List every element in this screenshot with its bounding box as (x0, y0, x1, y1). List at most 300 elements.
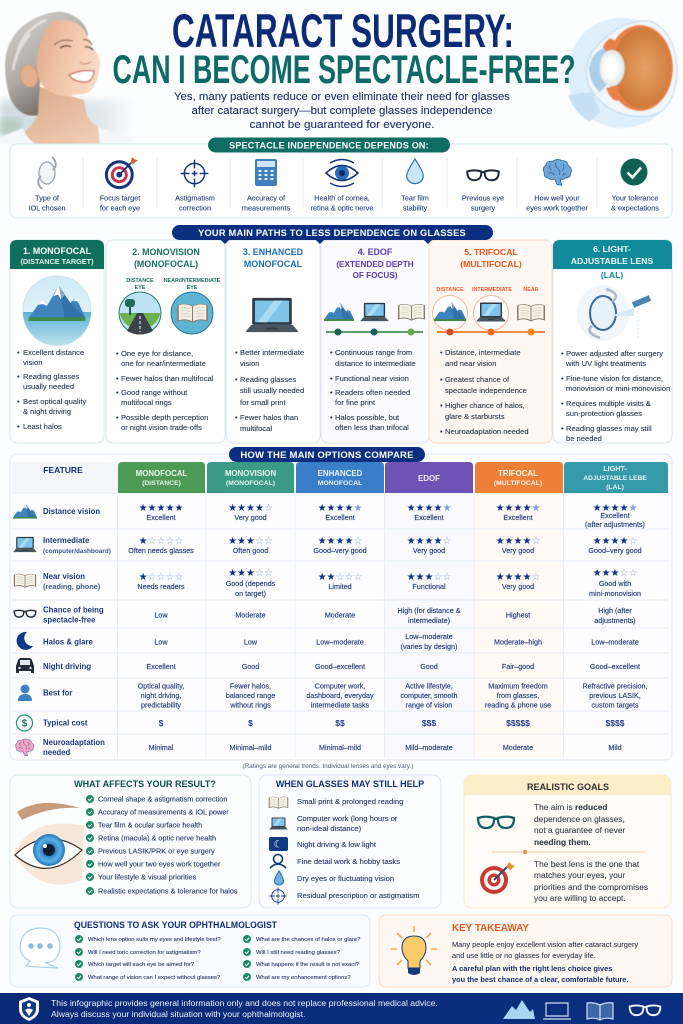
card 4: EDOF: distance to intermediate (335, 359, 416, 368)
card 2: monovision: (MONOFOCAL) (134, 259, 198, 269)
title: CATARACT SURGERY: (172, 4, 514, 57)
card 5: trifocal: (MULTIFOCAL) (460, 259, 522, 269)
row: neuroadaptation: Moderate (503, 743, 533, 752)
row: near vision: on target) (235, 589, 266, 598)
panel: questions to ask (10, 915, 370, 987)
card 5: trifocal: INTERMEDIATE (472, 287, 512, 293)
panel: what affects your result: Your lifestyle & visual priorities (98, 872, 197, 882)
row: best for: from glasses, (497, 691, 539, 700)
panel: when glasses may still help: WHEN GLASSES MAY STILL HELP (276, 779, 424, 789)
card 3: enhanced monofocal: multifocal (240, 424, 272, 433)
factor: IOL type: IOL chosen (28, 204, 66, 212)
card 5: trifocal: DISTANCE (436, 287, 464, 293)
card 2: monovision: • (116, 388, 119, 397)
row: distance vision (13, 503, 645, 529)
card 2: monovision: Possible depth perception (121, 413, 208, 422)
factor: tear film: Tear film (401, 194, 429, 202)
factor: focus target (100, 157, 140, 212)
card 1: monofocal: (DISTANCE TARGET) (20, 257, 94, 266)
row: neuroadaptation: Minimal (149, 743, 174, 752)
row: typical cost: $$$ (422, 718, 436, 728)
card 1: monofocal: • (17, 348, 20, 357)
row: near vision: ★★★★☆ (496, 572, 540, 583)
panel: when glasses may still help: non-ideal distance) (297, 824, 362, 833)
panel: questions to ask: Will I need toric correction for astigmatism? (88, 950, 201, 956)
card 6: light-adjustable lens: sun-protection glasses (566, 409, 642, 418)
card 4: EDOF: Readers often needed (335, 388, 410, 397)
row: typical cost (16, 715, 625, 731)
row: distance vision: (after adjustments) (585, 520, 645, 529)
card 5: trifocal: Distance, intermediate (445, 348, 521, 357)
card 3: enhanced monofocal: for small print (240, 398, 286, 407)
card 1: monofocal: Least halos (23, 422, 62, 431)
row: best for: intermediate tasks (311, 700, 370, 710)
card 5: trifocal: and near vision (445, 359, 497, 368)
row: near vision: Very good (502, 582, 534, 591)
card 4: EDOF: • (330, 413, 333, 422)
row: chance of being spectacle-free (14, 606, 636, 625)
panel: realistic goals: needing them. (534, 837, 591, 847)
factor: tear film (401, 159, 429, 212)
icon: eye illustration (13, 803, 84, 884)
card 6: light-adjustable lens: ADJUSTABLE LENS (571, 256, 653, 266)
panel: what affects your result: Previous LASIK/PRK or eye surgery (98, 846, 215, 856)
row: intermediate: Very good (502, 546, 534, 555)
panel: when glasses may still help: Dry eyes or fluctuating vision (297, 874, 394, 883)
row: typical cost: $$$$ (606, 718, 625, 728)
row: neuroadaptation: Minimal–mild (319, 743, 361, 752)
row: night driving: Excellent (146, 662, 176, 671)
card 3: enhanced monofocal: MONOFOCAL (244, 259, 303, 269)
row: halos and glare: (varies by design) (401, 642, 457, 651)
card 5: trifocal: Neuroadaptation needed (445, 427, 529, 436)
row: night driving: Good (242, 662, 259, 671)
row: intermediate: ★★★★☆ (407, 536, 451, 547)
row: distance vision: Distance vision (43, 507, 100, 516)
card 1: monofocal (10, 240, 104, 443)
row: best for: without rings (229, 700, 271, 710)
row: near vision: (reading, phone) (43, 582, 101, 591)
card 4: EDOF: Functional near vision (335, 374, 409, 383)
row: distance vision: ★★★★☆ (228, 503, 273, 514)
row: intermediate: ★☆☆☆☆ (139, 536, 183, 547)
icon: footer laptop (543, 1003, 571, 1019)
card 4: EDOF: Halos possible, but (335, 413, 400, 422)
card 6: light-adjustable lens: • (561, 399, 564, 408)
card 1: monofocal: • (17, 372, 20, 381)
factor: previous surgery: Previous eye (462, 194, 504, 202)
row: near vision: ★★★☆☆ (593, 568, 637, 579)
row: distance vision: ★★★★★ (407, 503, 451, 514)
card 3: enhanced monofocal: • (235, 413, 238, 422)
panel: when glasses may still help (259, 775, 441, 908)
factor: focus target: Focus target (100, 194, 140, 202)
row: night driving: Good (420, 662, 438, 671)
panel: what affects your result: Retina (macula) & optic nerve health (98, 834, 216, 842)
card 5: trifocal: • (440, 348, 443, 357)
card 6: light-adjustable lens: monovision or mini-monovision (566, 384, 670, 393)
row: best for: balanced range (226, 691, 275, 700)
photo: smiling older woman (0, 12, 135, 144)
footer bar: Always discuss your individual situation with your ophthalmologist. (51, 1009, 305, 1019)
factor: astigmatism: correction (179, 204, 211, 212)
row: chance of being spectacle-free: spectacle-free (43, 616, 96, 624)
factor: previous surgery (462, 170, 504, 212)
card 3: enhanced monofocal: Better intermediate (240, 348, 304, 357)
card 3: enhanced monofocal (226, 240, 320, 443)
card 5: trifocal: NEAR (523, 287, 539, 293)
panel: when glasses may still help: Residual prescription or astigmatism (297, 891, 419, 900)
card 6: light-adjustable lens: Requires multiple visits & (566, 399, 651, 408)
panel: when glasses may still help: ☾ (274, 840, 282, 850)
table header row: (MONOFOCAL) (226, 480, 275, 487)
panel: questions to ask: Which target will each eye be aimed for? (88, 962, 195, 968)
table header row: EDOF (418, 474, 440, 483)
panel: realistic goals: dependence on glasses, (534, 814, 625, 824)
footer bar (0, 993, 683, 1024)
row: near vision (14, 568, 641, 598)
row: typical cost: $$$$$ (506, 718, 530, 728)
row: best for (18, 682, 648, 710)
factor: binocular function: How well your (534, 194, 580, 202)
factor: measurements: Accuracy of (247, 194, 286, 202)
row: near vision: Near vision (43, 572, 85, 581)
icon: near eye book (171, 292, 213, 334)
row: distance vision: Excellent (600, 511, 630, 520)
icon: speech bubble (20, 928, 60, 968)
panel: spectacle independence factors (10, 138, 672, 218)
row: chance of being spectacle-free: High (for distance & (397, 606, 461, 615)
row: near vision: Functional (412, 582, 446, 591)
table header row: MONOVISION (225, 469, 276, 478)
row: night driving: Fair–good (502, 662, 534, 671)
row: best for: night driving, (141, 691, 181, 700)
row: chance of being spectacle-free: Highest (506, 610, 530, 620)
card 4: EDOF (321, 240, 429, 443)
card 3: enhanced monofocal: • (235, 348, 238, 357)
card 3: enhanced monofocal: Reading glasses (240, 375, 296, 384)
card 4: EDOF: often less than trifocal (335, 423, 409, 432)
comparison table (10, 447, 672, 760)
row: chance of being spectacle-free: Moderate (235, 610, 266, 620)
factor: measurements (242, 159, 290, 212)
row: typical cost: $ (248, 718, 253, 728)
card 6: light-adjustable lens: be needed (566, 434, 602, 443)
table header row (43, 462, 668, 493)
factor: expectations: & expectations (611, 204, 659, 212)
icon: light bulb (391, 926, 437, 975)
heading pill: main paths (172, 225, 493, 244)
row: best for: reading & phone use (485, 700, 551, 710)
card 1: monofocal: & night driving (23, 407, 71, 416)
row: best for: Computer work, (315, 682, 365, 690)
card 6: light-adjustable lens: Reading glasses may still (566, 424, 652, 433)
panel: key takeaway: and use little or no glasses for everyday life. (452, 951, 596, 960)
footer bar: This infographic provides general information only and does not replace professional medical advice. (51, 998, 438, 1008)
card 4: EDOF: • (330, 388, 333, 397)
factor: IOL type (28, 157, 66, 212)
row: halos and glare: Low–moderate (405, 632, 453, 641)
heading pill: SPECTACLE INDEPENDENCE DEPENDS ON: (229, 140, 429, 150)
panel: when glasses may still help: Night driving & low light (297, 840, 377, 849)
card 4: EDOF: OF FOCUS) (352, 271, 398, 280)
panel: questions to ask: What are the chances of halos or glare? (256, 937, 361, 943)
row: distance vision: ★★★★★ (139, 503, 183, 514)
panel: realistic goals: matches your eyes, your (534, 870, 625, 880)
row: best for: predictability (141, 700, 181, 710)
panel: questions to ask: QUESTIONS TO ASK YOUR OPHTHALMOLOGIST (74, 919, 277, 930)
card 2: monovision: multifocal rings (121, 398, 172, 407)
row: best for: Fewer halos, (230, 682, 271, 690)
panel: questions to ask: What happens if the result is not exact? (256, 962, 360, 968)
card 3: enhanced monofocal: 3. ENHANCED (243, 247, 304, 257)
panel: key takeaway: Many people enjoy excellent vision after cataract surgery (452, 940, 638, 949)
table header row: MONOFOCAL (318, 480, 362, 487)
card 2: monovision: Good range without (121, 388, 188, 397)
row: halos and glare: Low–moderate (591, 638, 639, 646)
panel: questions to ask: What range of vision can I expect without glasses? (88, 975, 221, 981)
row: intermediate: Very good (413, 546, 445, 555)
card 2: monovision (106, 240, 225, 443)
row: halos and glare (17, 632, 639, 651)
table header row: (DISTANCE) (142, 480, 181, 487)
panel: what affects your result: Accuracy of measurements & IOL power (98, 808, 229, 816)
row: halos and glare: Low (154, 638, 168, 646)
card 3: enhanced monofocal: vision (240, 359, 259, 368)
row: best for: computer, smooth (400, 691, 458, 700)
icon: footer glasses (630, 1005, 660, 1015)
card 5: trifocal: • (440, 427, 443, 436)
card 4: EDOF: for fine print (335, 398, 376, 407)
table header row: ADJUSTABLE LEBE (583, 475, 647, 482)
row: distance vision: Very good (234, 513, 267, 522)
row: near vision: ★★★☆☆ (228, 568, 273, 579)
panel: what affects your result: Corneal shape & astigmatism correction (98, 794, 227, 804)
row: neuroadaptation: Neuroadaptation (43, 738, 105, 747)
factor: astigmatism: Astigmatism (175, 194, 215, 202)
row: best for: Best for (43, 688, 72, 698)
factor: focus target: for each eye (100, 204, 140, 212)
panel: what affects your result: WHAT AFFECTS YOUR RESULT? (74, 779, 216, 789)
card 4: EDOF: • (330, 374, 333, 383)
panel: what affects your result (10, 775, 251, 908)
factor: ocular health (311, 160, 373, 212)
factor: measurements: measurements (242, 204, 290, 212)
panel: realistic goals: priorities and the compromises (534, 882, 648, 892)
row: intermediate: ★★★☆☆ (228, 536, 273, 547)
row: best for: Maximum freedom (488, 682, 548, 690)
table header row: LIGHT- (603, 464, 627, 473)
icon: lens with UV light (577, 285, 650, 341)
row: near vision: Good with (599, 579, 631, 588)
panel: what affects your result: Tear film & ocular surface health (98, 820, 202, 830)
row: intermediate: Intermediate (43, 536, 90, 545)
card 3: enhanced monofocal: still usually needed (240, 386, 304, 395)
heading pill (208, 138, 450, 152)
card 6: light-adjustable lens: Fine-tune vision for distance, (566, 374, 663, 383)
table header row: TRIFOCAL (498, 469, 538, 478)
subtitle: Yes, many patients reduce or even eliminate their need for glasses (174, 91, 511, 103)
row: typical cost: Typical cost (43, 718, 88, 728)
card 1: monofocal: Reading glasses (23, 372, 79, 381)
panel: key takeaway: you the best chance of a clear, comfortable future. (452, 975, 629, 984)
row: night driving (16, 658, 640, 673)
card 1: monofocal: 1. MONOFOCAL (23, 246, 92, 256)
card 5: trifocal (429, 240, 552, 443)
card 1: monofocal: vision (23, 358, 42, 367)
photo: eye anatomy cross-section (567, 18, 677, 128)
card 3: enhanced monofocal: • (235, 375, 238, 384)
row: distance vision: Excellent (414, 513, 444, 522)
row: distance vision: ★★★★★ (496, 503, 540, 514)
row: chance of being spectacle-free: High (after (598, 606, 632, 615)
card 2: monovision: • (116, 349, 119, 358)
title (112, 4, 576, 92)
panel: realistic goals: The aim is reduced (534, 802, 608, 812)
row: best for: previous LASIK, (589, 691, 641, 700)
panel: what affects your result: Realistic expectations & tolerance for halos (98, 886, 238, 896)
panel: key takeaway (379, 915, 672, 987)
panel: when glasses may still help: Small print & prolonged reading (297, 797, 403, 806)
panel: questions to ask: What are my enhancement options? (256, 975, 351, 981)
row: distance vision: Excellent (503, 513, 533, 522)
card 4: EDOF: (EXTENDED DEPTH (336, 260, 414, 269)
row: intermediate: ★★★★☆ (593, 536, 637, 547)
card 2: monovision: EYE (135, 285, 146, 291)
panel: key takeaway: A careful plan with the right lens choice gives (452, 964, 612, 973)
card 4: EDOF: 4. EDOF (358, 247, 393, 257)
row: halos and glare: Halos & glare (43, 638, 93, 646)
heading pill: comparison: HOW THE MAIN OPTIONS COMPARE (240, 450, 414, 461)
heading pill: comparison (229, 447, 425, 462)
card 2: monovision: • (116, 374, 119, 383)
card 1: monofocal: • (17, 422, 20, 431)
table header row: FEATURE (43, 465, 83, 475)
card 2: monovision: EYE (187, 285, 198, 291)
row: night driving: Good–excellent (315, 662, 365, 671)
factor: expectations: Your tolerance (612, 194, 658, 202)
footnote: (Ratings are general trends. Individual lenses and eyes vary.) (243, 763, 413, 770)
card 6: light-adjustable lens: with UV light treatments (565, 359, 646, 368)
card 2: monovision: 2. MONOVISION (132, 247, 200, 257)
row: halos and glare: Moderate–high (494, 638, 542, 646)
panel: realistic goals: you are willing to accept. (534, 893, 626, 903)
subtitle (174, 91, 511, 131)
card 4: EDOF: • (330, 348, 333, 357)
row: intermediate: Often needs glasses (128, 546, 194, 555)
card 5: trifocal: 5. TRIFOCAL (464, 247, 518, 257)
row: best for: Refractive precision, (582, 682, 648, 690)
card 5: trifocal: Higher chance of halos, (445, 401, 525, 410)
subtitle: after cataract surgery—but complete glasses independence (192, 105, 492, 117)
factor: tear film: stability (403, 204, 428, 212)
row: best for: dashboard, everyday (306, 691, 374, 700)
card 1: monofocal: Best optical quality (23, 397, 87, 406)
row: intermediate: Often good (233, 546, 268, 555)
row: night driving: Good–excellent (590, 662, 640, 671)
row: typical cost: $ (22, 718, 28, 730)
card 5: trifocal: • (440, 401, 443, 410)
panel: when glasses may still help: Fine detail work & hobby tasks (297, 857, 400, 866)
row: distance vision: ★★★★★ (593, 503, 637, 514)
row: halos and glare: Low (244, 638, 258, 646)
heading pill: main paths: YOUR MAIN PATHS TO LESS DEPENDENCE ON GLASSES (198, 228, 466, 238)
row: chance of being spectacle-free: adjustments) (594, 616, 636, 625)
card 2: monovision: Fewer halos than multifocal (121, 374, 214, 383)
row: distance vision: Excellent (325, 513, 355, 522)
row: near vision: ★★★☆☆ (407, 572, 451, 583)
factor: previous surgery: surgery (471, 204, 496, 212)
card 6: light-adjustable lens: 6. LIGHT- (593, 244, 631, 254)
card 1: monofocal: • (17, 397, 20, 406)
subtitle: cannot be guaranteed for everyone. (250, 119, 434, 131)
row: neuroadaptation: Mild (608, 743, 622, 752)
row: halos and glare: Low–moderate (316, 638, 364, 646)
panel: realistic goals (464, 775, 671, 908)
row: intermediate: ★★★★☆ (318, 536, 362, 547)
card 6: light-adjustable lens: • (561, 374, 564, 383)
row: chance of being spectacle-free: Chance of being (43, 606, 104, 614)
card 3: enhanced monofocal: Fewer halos than (240, 413, 298, 422)
card 2: monovision: One eye for distance, (121, 349, 193, 358)
icon: target with arrow (480, 862, 515, 894)
factor: astigmatism (175, 160, 215, 212)
row: best for: Active lifestyle, (405, 682, 453, 690)
panel: key takeaway: KEY TAKEAWAY (452, 922, 529, 934)
panel: when glasses may still help: Computer work (long hours or (297, 814, 398, 823)
card 1: monofocal: usually needed (23, 382, 74, 391)
card 6: light-adjustable lens: Power adjusted after surgery (566, 349, 663, 358)
row: chance of being spectacle-free: Moderate (325, 610, 355, 620)
table header row: MONOFOCAL (136, 469, 188, 478)
panel: IOL path cards (10, 225, 672, 443)
row: distance vision: ★★★★★ (318, 503, 362, 514)
card 4: EDOF: Continuous range from (335, 348, 412, 357)
card 2: monovision: DISTANCE (126, 278, 154, 284)
icon: footer mountains (503, 1000, 535, 1019)
row: near vision: Good (depends (226, 579, 276, 588)
card 2: monovision: • (116, 413, 119, 422)
card 6: light-adjustable lens (553, 240, 672, 443)
card 2: monovision: NEAR/INTERMEDIATE (164, 278, 221, 284)
card 5: trifocal: Greatest chance of (445, 375, 510, 384)
row: best for: Optical quality, (138, 682, 184, 690)
icon: footer book (587, 1003, 613, 1020)
panel: realistic goals: REALISTIC GOALS (527, 782, 609, 792)
row: near vision: Limited (328, 582, 352, 591)
row: distance vision: Excellent (146, 513, 176, 522)
row: typical cost: $$ (335, 718, 345, 728)
card 2: monovision: one for near/intermediate (121, 359, 206, 368)
row: near vision: ★☆☆☆☆ (139, 572, 183, 583)
icon: glasses (478, 817, 514, 828)
icon: distance eye road (119, 292, 161, 334)
row: neuroadaptation: needed (43, 748, 71, 757)
panel: questions to ask: Which lens option suits my eyes and lifestyle best? (88, 937, 221, 943)
icon: shield (19, 997, 39, 1021)
factor: binocular function: eyes work together (526, 204, 588, 212)
row: intermediate: Good–very good (588, 546, 642, 555)
row: neuroadaptation (16, 738, 622, 757)
row: best for: range of vision (406, 700, 452, 710)
table header row: ENHANCED (318, 469, 363, 478)
row: near vision: mini-monovision (589, 589, 641, 598)
factor: binocular function (526, 159, 588, 212)
panel: realistic goals: not a guarantee of never (534, 825, 625, 835)
row: neuroadaptation: Mild–moderate (405, 743, 453, 752)
row: intermediate: ★★★★☆ (496, 536, 540, 547)
row: typical cost: $ (159, 718, 164, 728)
